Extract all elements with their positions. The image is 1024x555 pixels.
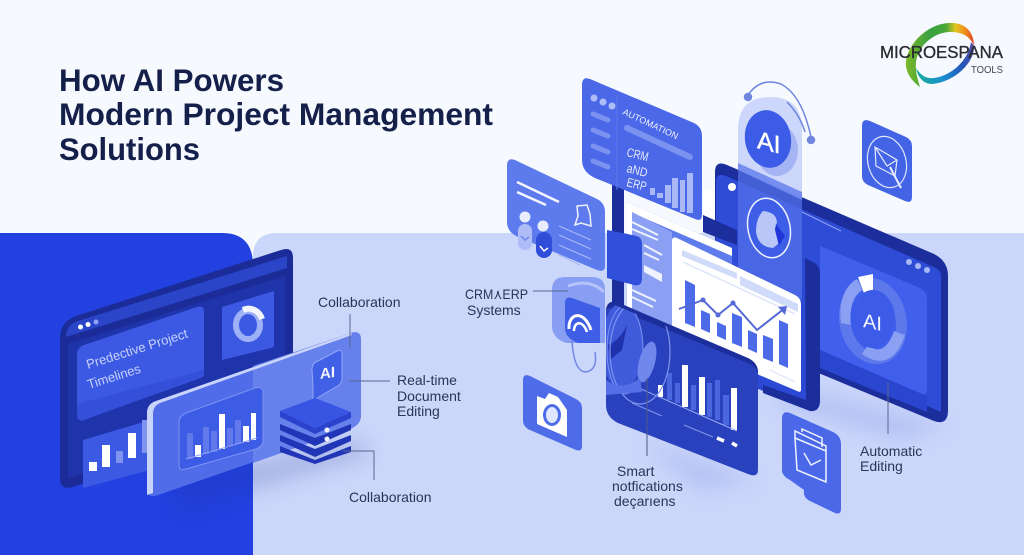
- mini bars: [650, 173, 693, 213]
- card: predictive timelines: [77, 307, 204, 420]
- panel: blue background: [0, 233, 253, 555]
- AI bubble: [312, 350, 342, 401]
- people icons: [518, 212, 552, 258]
- dashboard shadow: [640, 385, 948, 490]
- big right dashboard: [715, 164, 948, 434]
- donut with AI: AI: [863, 310, 882, 336]
- left dashboard: [60, 249, 293, 488]
- translucent AI column: [738, 82, 841, 300]
- pie circle: [742, 194, 796, 262]
- white chart panel: [672, 237, 801, 392]
- trend line: [679, 298, 787, 330]
- connector: smart notifications: [646, 378, 648, 456]
- label: real-time document editing: [397, 372, 461, 419]
- label: CRM ERP systems: [465, 286, 528, 318]
- logo: [880, 23, 1003, 87]
- arc with end dots: [744, 82, 814, 144]
- glass card shadow: [170, 440, 370, 510]
- sidebar lines: [593, 114, 608, 167]
- document panel: [627, 202, 732, 340]
- card: predictive timelines: Predective Project: [84, 326, 190, 372]
- connector: CRM ERP: [533, 290, 568, 292]
- CRM and ERP: CRM: [625, 145, 650, 164]
- title: [59, 62, 493, 167]
- label: smart notifications: deçarıens: [614, 493, 675, 509]
- donut with AI: [838, 274, 908, 364]
- glass card: [147, 332, 361, 496]
- label: real-time document editing: Document: [397, 388, 461, 404]
- card: bar chart: [83, 420, 150, 488]
- connector tab: [607, 230, 642, 285]
- panel: light background: [253, 233, 1024, 555]
- card: donut: [222, 291, 274, 360]
- window dots: [78, 320, 98, 330]
- server stack: [280, 398, 351, 464]
- title: Modern Project Management: [59, 96, 493, 132]
- CRM and ERP: aND: [625, 161, 649, 180]
- labels: left connectors: [343, 314, 390, 480]
- people card: [507, 159, 605, 271]
- email icon: [862, 120, 912, 202]
- card: predictive timelines: Timelines: [85, 361, 143, 392]
- chart bars: [685, 280, 788, 368]
- label: automatic editing: Automatic: [860, 443, 922, 459]
- CRM and ERP: [625, 145, 650, 194]
- label: real-time document editing: Real-time: [397, 372, 457, 388]
- label: smart notifications: Smart: [617, 463, 654, 479]
- mini bar chart: [179, 388, 263, 470]
- label: automatic editing: Editing: [860, 458, 903, 474]
- label: real-time document editing: Editing: [397, 403, 440, 419]
- logo: MICROESPANA: [880, 42, 1003, 62]
- AI circle: [740, 106, 798, 176]
- AI bubble: AI: [320, 364, 335, 383]
- middle frame with document: [612, 175, 820, 411]
- label: CRM ERP systems: CRM⋏ERP: [465, 286, 528, 302]
- connector: automatic editing: [887, 382, 889, 434]
- swirl over tablet: [601, 300, 670, 404]
- label: collaboration top: Collaboration: [318, 294, 400, 310]
- label: smart notifications: [612, 463, 683, 509]
- label: automatic editing: [860, 443, 922, 474]
- AUTOMATION heading: AUTOMATION: [621, 107, 680, 141]
- window dots: [906, 259, 930, 273]
- label: smart notifications: notfications: [612, 478, 683, 494]
- label: collaboration bottom: Collaboration: [349, 489, 432, 505]
- swirl icon cluster: [552, 277, 670, 404]
- CRM and ERP: ERP: [625, 175, 648, 194]
- AUTOMATION panel: [582, 78, 702, 220]
- title: Solutions: [59, 131, 200, 167]
- logo: TOOLS: [971, 65, 1003, 76]
- label: CRM ERP systems: Systems: [467, 302, 521, 318]
- dark tablet: [606, 302, 758, 475]
- AI circle: AI: [757, 126, 781, 160]
- window dots: [590, 94, 616, 110]
- title: How AI Powers: [59, 62, 284, 98]
- document tag icon: [782, 412, 841, 514]
- camera icon: [523, 375, 582, 450]
- tablet bars: [658, 365, 737, 430]
